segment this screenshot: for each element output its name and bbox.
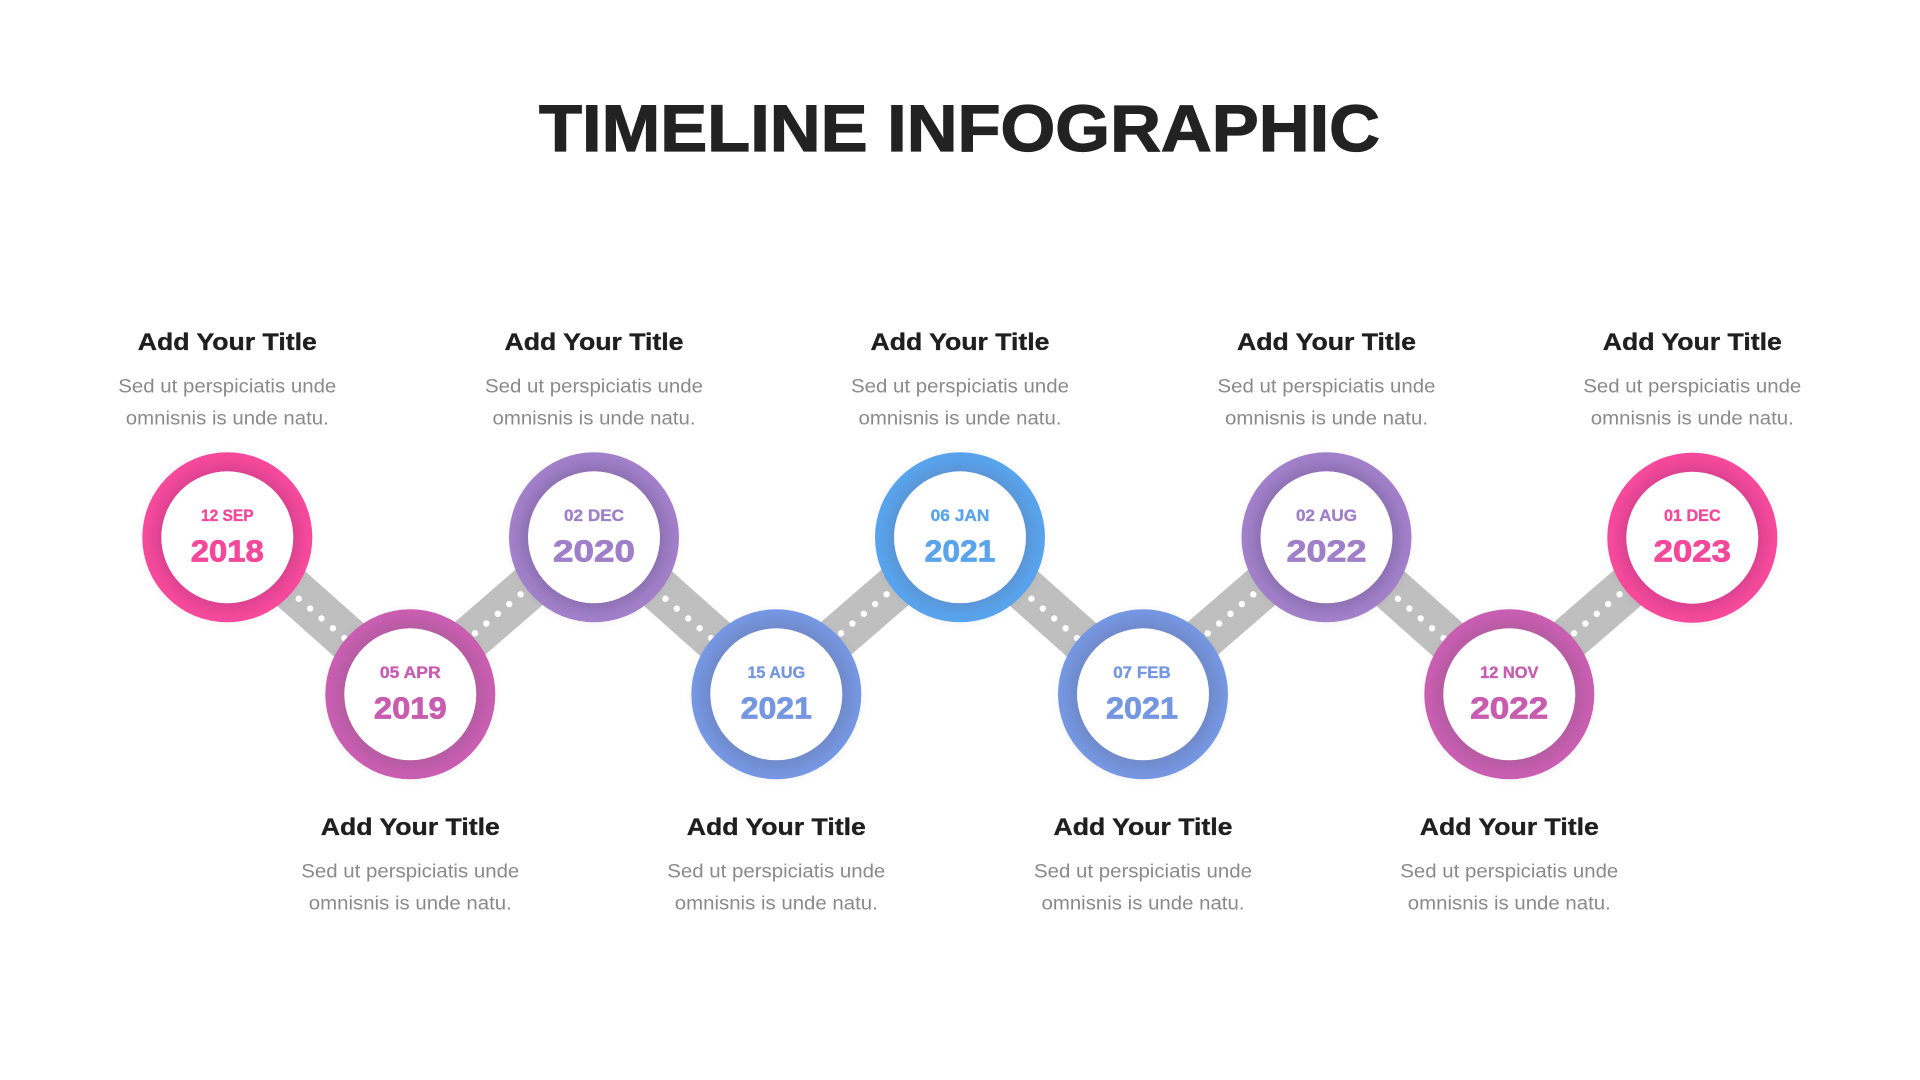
- milestone 6: 07 FEB 2021: 2021: [1106, 691, 1178, 726]
- milestone 1: 12 SEP 2018: 12 SEP: [201, 507, 254, 525]
- milestone 5: 06 JAN 2021: 06 JAN: [931, 507, 989, 525]
- milestone 6: 07 FEB 2021: [1034, 609, 1252, 914]
- milestone 8: 12 NOV 2022: omnisnis is unde natu.: [1408, 892, 1611, 914]
- milestone 6: 07 FEB 2021: Add Your Title: [1054, 814, 1232, 841]
- milestone 8: 12 NOV 2022: 2022: [1470, 691, 1548, 726]
- milestone 3: 02 DEC 2020: [485, 329, 703, 622]
- milestone 1: 12 SEP 2018: Add Your Title: [138, 329, 317, 356]
- milestone 2: 05 APR 2019: Add Your Title: [321, 814, 500, 841]
- milestone 4: 15 AUG 2021: 2021: [741, 691, 812, 726]
- milestone 5: 06 JAN 2021: omnisnis is unde natu.: [858, 407, 1062, 429]
- connector road 3: [639, 572, 734, 656]
- milestone 1: 12 SEP 2018: [118, 329, 336, 622]
- connector road 8: [1549, 569, 1649, 656]
- connector road 2: [450, 569, 550, 656]
- milestone 8: 12 NOV 2022: Add Your Title: [1420, 814, 1599, 841]
- milestone 1: 12 SEP 2018: Sed ut perspiciatis unde: [118, 375, 336, 397]
- milestone 2: 05 APR 2019: 05 APR: [380, 664, 441, 682]
- connector road 6: [1183, 569, 1283, 656]
- milestone 2: 05 APR 2019: 2019: [374, 691, 447, 726]
- milestone 4: 15 AUG 2021: 15 AUG: [747, 664, 805, 682]
- milestone 6: 07 FEB 2021: Sed ut perspiciatis unde: [1034, 860, 1252, 882]
- milestone 1: 12 SEP 2018: omnisnis is unde natu.: [126, 407, 329, 429]
- milestone 3: 02 DEC 2020: Add Your Title: [504, 329, 684, 356]
- milestone 9: 01 DEC 2023: omnisnis is unde natu.: [1591, 407, 1794, 429]
- milestone 8: 12 NOV 2022: Sed ut perspiciatis unde: [1400, 860, 1618, 882]
- milestone 8: 12 NOV 2022: 12 NOV: [1480, 664, 1539, 682]
- connector road 4: [816, 569, 916, 656]
- milestone 7: 02 AUG 2022: 2022: [1286, 534, 1366, 569]
- milestone 4: 15 AUG 2021: [667, 609, 885, 914]
- milestone 7: 02 AUG 2022: [1218, 329, 1436, 622]
- title: TIMELINE INFOGRAPHIC: [539, 92, 1380, 165]
- milestone 9: 01 DEC 2023: Add Your Title: [1603, 329, 1782, 356]
- milestone 3: 02 DEC 2020: 02 DEC: [564, 507, 624, 525]
- milestone 2: 05 APR 2019: [301, 609, 519, 914]
- milestone 9: 01 DEC 2023: 01 DEC: [1664, 507, 1721, 525]
- milestone 6: 07 FEB 2021: omnisnis is unde natu.: [1042, 892, 1244, 914]
- milestone 5: 06 JAN 2021: Add Your Title: [870, 329, 1050, 356]
- milestone 2: 05 APR 2019: Sed ut perspiciatis unde: [301, 860, 519, 882]
- milestone 4: 15 AUG 2021: Add Your Title: [687, 814, 866, 841]
- milestone 8: 12 NOV 2022: [1400, 609, 1618, 914]
- milestone 3: 02 DEC 2020: 2020: [553, 534, 635, 569]
- milestone 3: 02 DEC 2020: Sed ut perspiciatis unde: [485, 375, 703, 397]
- connector road 1: [272, 572, 367, 656]
- connector road 7: [1372, 572, 1466, 656]
- milestone 7: 02 AUG 2022: omnisnis is unde natu.: [1225, 407, 1428, 429]
- milestone 7: 02 AUG 2022: Add Your Title: [1237, 329, 1416, 356]
- milestone 7: 02 AUG 2022: 02 AUG: [1296, 507, 1357, 525]
- milestone 9: 01 DEC 2023: Sed ut perspiciatis unde: [1583, 375, 1801, 397]
- milestone 7: 02 AUG 2022: Sed ut perspiciatis unde: [1218, 375, 1436, 397]
- milestone 2: 05 APR 2019: omnisnis is unde natu.: [309, 892, 512, 914]
- milestone 6: 07 FEB 2021: 07 FEB: [1113, 664, 1171, 682]
- milestone 4: 15 AUG 2021: Sed ut perspiciatis unde: [667, 860, 885, 882]
- connector road 5: [1005, 572, 1100, 656]
- milestone 9: 01 DEC 2023: 2023: [1654, 534, 1731, 569]
- milestone 5: 06 JAN 2021: Sed ut perspiciatis unde: [851, 375, 1069, 397]
- milestone 1: 12 SEP 2018: 2018: [191, 534, 264, 569]
- milestone 9: 01 DEC 2023: [1583, 329, 1801, 623]
- milestone 5: 06 JAN 2021: [851, 329, 1069, 622]
- milestone 5: 06 JAN 2021: 2021: [925, 534, 995, 569]
- milestone 3: 02 DEC 2020: omnisnis is unde natu.: [492, 407, 696, 429]
- milestone 4: 15 AUG 2021: omnisnis is unde natu.: [675, 892, 878, 914]
